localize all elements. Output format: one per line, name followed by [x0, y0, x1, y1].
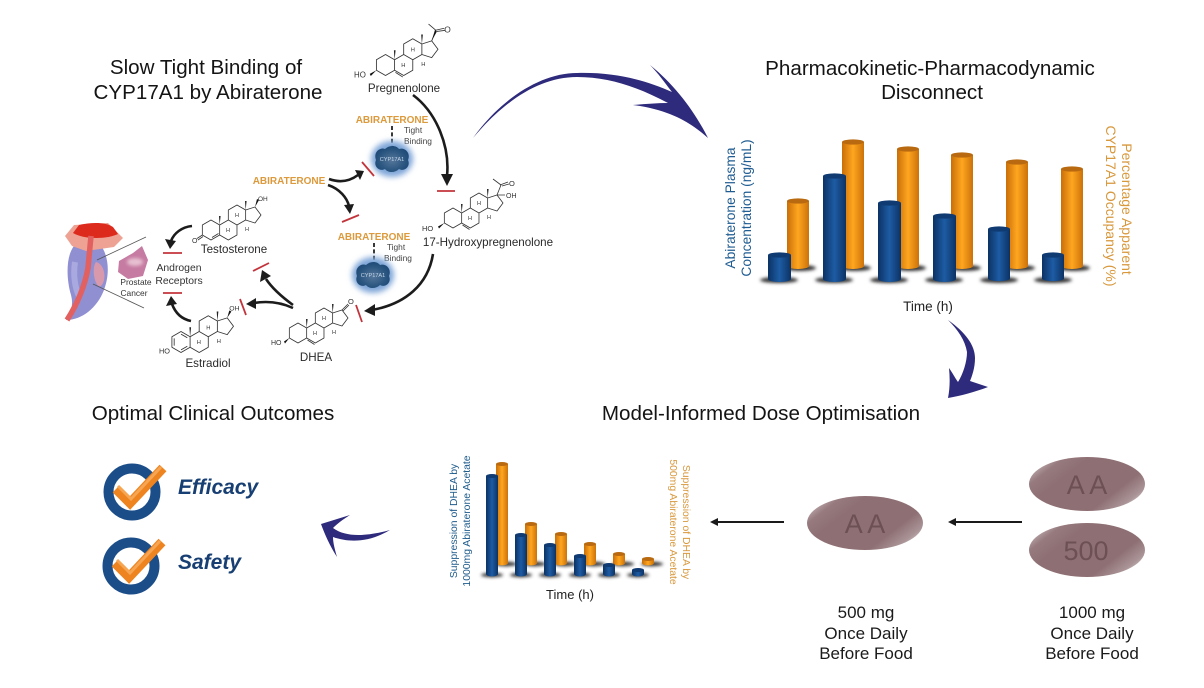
arrow: 500 mg to suppression chart [710, 518, 784, 526]
dose label: 500 mg: Before Food [819, 644, 913, 663]
curved arrow: to dose optimisation [948, 320, 988, 398]
label: safety: Safety [178, 551, 242, 574]
tablet: 1000 mg top: A A [1067, 470, 1107, 500]
series: 500 mg [495, 462, 663, 566]
title: PK-PD disconnect: Disconnect [881, 81, 983, 104]
molecule: pregnenolone: H [401, 63, 405, 69]
molecule: estradiol: HO [159, 347, 170, 356]
label: efficacy: Efficacy [178, 476, 259, 499]
inhibition bar: upper abiraterone [362, 162, 374, 176]
tight binding link lower [374, 242, 412, 263]
label: prostate cancer: Prostate [120, 277, 152, 287]
illustration: prostate cancer tissue [118, 246, 148, 279]
axis label: abiraterone plasma concentration: Abiraterone Plasma [723, 147, 738, 269]
molecule: testosterone: O [192, 238, 198, 245]
molecule: DHEA: H [322, 316, 326, 322]
label: abiraterone lower: ABIRATERONE [338, 232, 411, 243]
molecule: estradiol [159, 306, 240, 356]
label: abiraterone top: ABIRATERONE [356, 115, 429, 126]
label: prostate cancer: Cancer [120, 288, 148, 298]
molecule: pregnenolone: HO [354, 71, 366, 80]
molecule: testosterone: OH [258, 196, 268, 203]
title: slow tight binding: Slow Tight Binding of [110, 56, 302, 79]
bar chart: PK-PD [760, 139, 1090, 283]
arrow: 17-hydroxypregnenolone to DHEA [364, 254, 433, 316]
enzyme: CYP17A1 top [371, 141, 413, 177]
molecule: 17-hydroxypregnenolone: H [477, 201, 481, 207]
tight binding link top: Binding [404, 136, 432, 146]
title: slow tight binding: CYP17A1 by Abiraterone [94, 81, 322, 104]
molecule: 17-hydroxypregnenolone: HO [422, 224, 433, 233]
molecule: estradiol: H [197, 340, 201, 346]
icon: safety check [108, 541, 162, 590]
tablet: 1000 mg top [1029, 457, 1145, 511]
label: testosterone: Testosterone [201, 243, 267, 256]
title: PK-PD disconnect: Pharmacokinetic-Pharmacodynamic [765, 57, 1095, 80]
axis label: suppression 1000 mg: 1000mg Abiraterone Acetate [462, 455, 473, 587]
inhibition bar: to estradiol [240, 299, 246, 315]
tight binding link top: Tight [404, 125, 423, 135]
arrow: testosterone to androgen receptors [165, 226, 192, 249]
axis label: time suppression: Time (h) [546, 587, 594, 602]
molecule: testosterone: H [226, 228, 230, 234]
enzyme: CYP17A1 lower [352, 257, 394, 293]
axis label: suppression 500 mg: Suppression of DHEA by [680, 465, 691, 579]
tight binding link lower: Tight [387, 242, 406, 252]
axis label: abiraterone plasma concentration: Concentration (ng/mL) [739, 139, 754, 277]
label: estradiol: Estradiol [185, 357, 231, 370]
series: 1000 mg [481, 474, 649, 577]
arrows: abiraterone to inhibition bars [328, 170, 364, 214]
axis label: suppression 1000 mg: Suppression of DHEA by [449, 464, 460, 578]
bar chart: DHEA suppression [481, 462, 663, 577]
molecule: 17-hydroxypregnenolone: O [509, 179, 515, 188]
molecule: testosterone: H [235, 213, 239, 219]
arrow: estradiol to androgen receptors [166, 296, 191, 321]
arrow: pregnenolone to 17-hydroxypregnenolone [413, 95, 453, 186]
label: androgen receptors: Receptors [155, 276, 203, 287]
dose label: 1000 mg: 1000 mg [1059, 603, 1125, 622]
illustration: prostate anatomy [65, 223, 146, 320]
title: optimal clinical outcomes: Optimal Clinical Outcomes [92, 402, 334, 425]
arrows: DHEA to testosterone and estradiol [246, 270, 293, 309]
molecule: pregnenolone [354, 24, 451, 80]
molecule: estradiol: H [217, 339, 221, 345]
tablet: 500 mg [807, 496, 923, 550]
label: DHEA: DHEA [300, 351, 332, 364]
inhibition bar: lower abiraterone [342, 215, 359, 222]
molecule: estradiol: OH [229, 306, 240, 313]
molecule: 17-hydroxypregnenolone [422, 179, 516, 233]
inhibition bar: 17-hydroxylation [437, 190, 455, 192]
molecule: DHEA: O [348, 297, 354, 306]
molecule: DHEA: H [313, 331, 317, 337]
inhibition bar: 17,20-lyase [356, 305, 362, 322]
axis label: time PK-PD: Time (h) [903, 299, 953, 314]
molecule: 17-hydroxypregnenolone: H [487, 215, 491, 221]
label: 17-hydroxypregnenolone: 17-Hydroxypregnenolone [423, 236, 553, 249]
axis label: CYP17A1 occupancy: CYP17A1 Occupancy (%) [1103, 125, 1119, 287]
inhibition bar: to testosterone [253, 263, 269, 271]
molecule: DHEA: HO [271, 340, 282, 347]
label: androgen receptors: Androgen [156, 263, 202, 274]
curved arrow: to clinical outcomes [321, 515, 390, 557]
icon: efficacy check [108, 467, 163, 516]
tablet: 500 mg: A A [845, 509, 885, 539]
series: CYP17A1 occupancy [784, 139, 1090, 271]
tablet: 1000 mg bottom: 500 [1063, 536, 1109, 566]
molecule: testosterone: H [245, 227, 249, 233]
axis label: suppression 500 mg: 500mg Abiraterone Acetate [667, 459, 678, 585]
tight binding link lower: Binding [384, 253, 412, 263]
molecule: pregnenolone: O [444, 24, 451, 34]
title: model-informed dose optimisation: Model-Informed Dose Optimisation [602, 402, 920, 425]
molecule: 17-hydroxypregnenolone: H [468, 216, 472, 222]
molecule: DHEA [271, 297, 354, 347]
inhibition bar: receptors bottom [163, 292, 182, 294]
enzyme: CYP17A1 lower: CYP17A1 [361, 273, 385, 279]
label: pregnenolone: Pregnenolone [368, 82, 440, 95]
tablet: 1000 mg bottom [1029, 523, 1145, 577]
molecule: pregnenolone: H [411, 47, 415, 53]
inhibition bar: receptors top [163, 252, 182, 254]
label: abiraterone centre: ABIRATERONE [253, 176, 326, 187]
series: abiraterone concentration [760, 173, 1072, 283]
molecule: 17-hydroxypregnenolone: OH [506, 193, 516, 200]
axis label: CYP17A1 occupancy: Percentage Apparent [1119, 143, 1135, 275]
arrow: 1000 mg to 500 mg [948, 518, 1022, 526]
molecule: pregnenolone: H [421, 62, 425, 68]
dose label: 1000 mg: Before Food [1045, 644, 1139, 663]
dose label: 1000 mg: Once Daily [1050, 624, 1134, 643]
molecule: testosterone [192, 196, 268, 245]
enzyme: CYP17A1 top: CYP17A1 [380, 157, 404, 163]
tight binding link top [392, 125, 432, 146]
curved arrow: to PK-PD panel [473, 65, 708, 138]
molecule: DHEA: H [332, 330, 336, 336]
dose label: 500 mg: Once Daily [824, 624, 908, 643]
molecule: estradiol: H [206, 325, 210, 331]
dose label: 500 mg: 500 mg [838, 603, 894, 622]
